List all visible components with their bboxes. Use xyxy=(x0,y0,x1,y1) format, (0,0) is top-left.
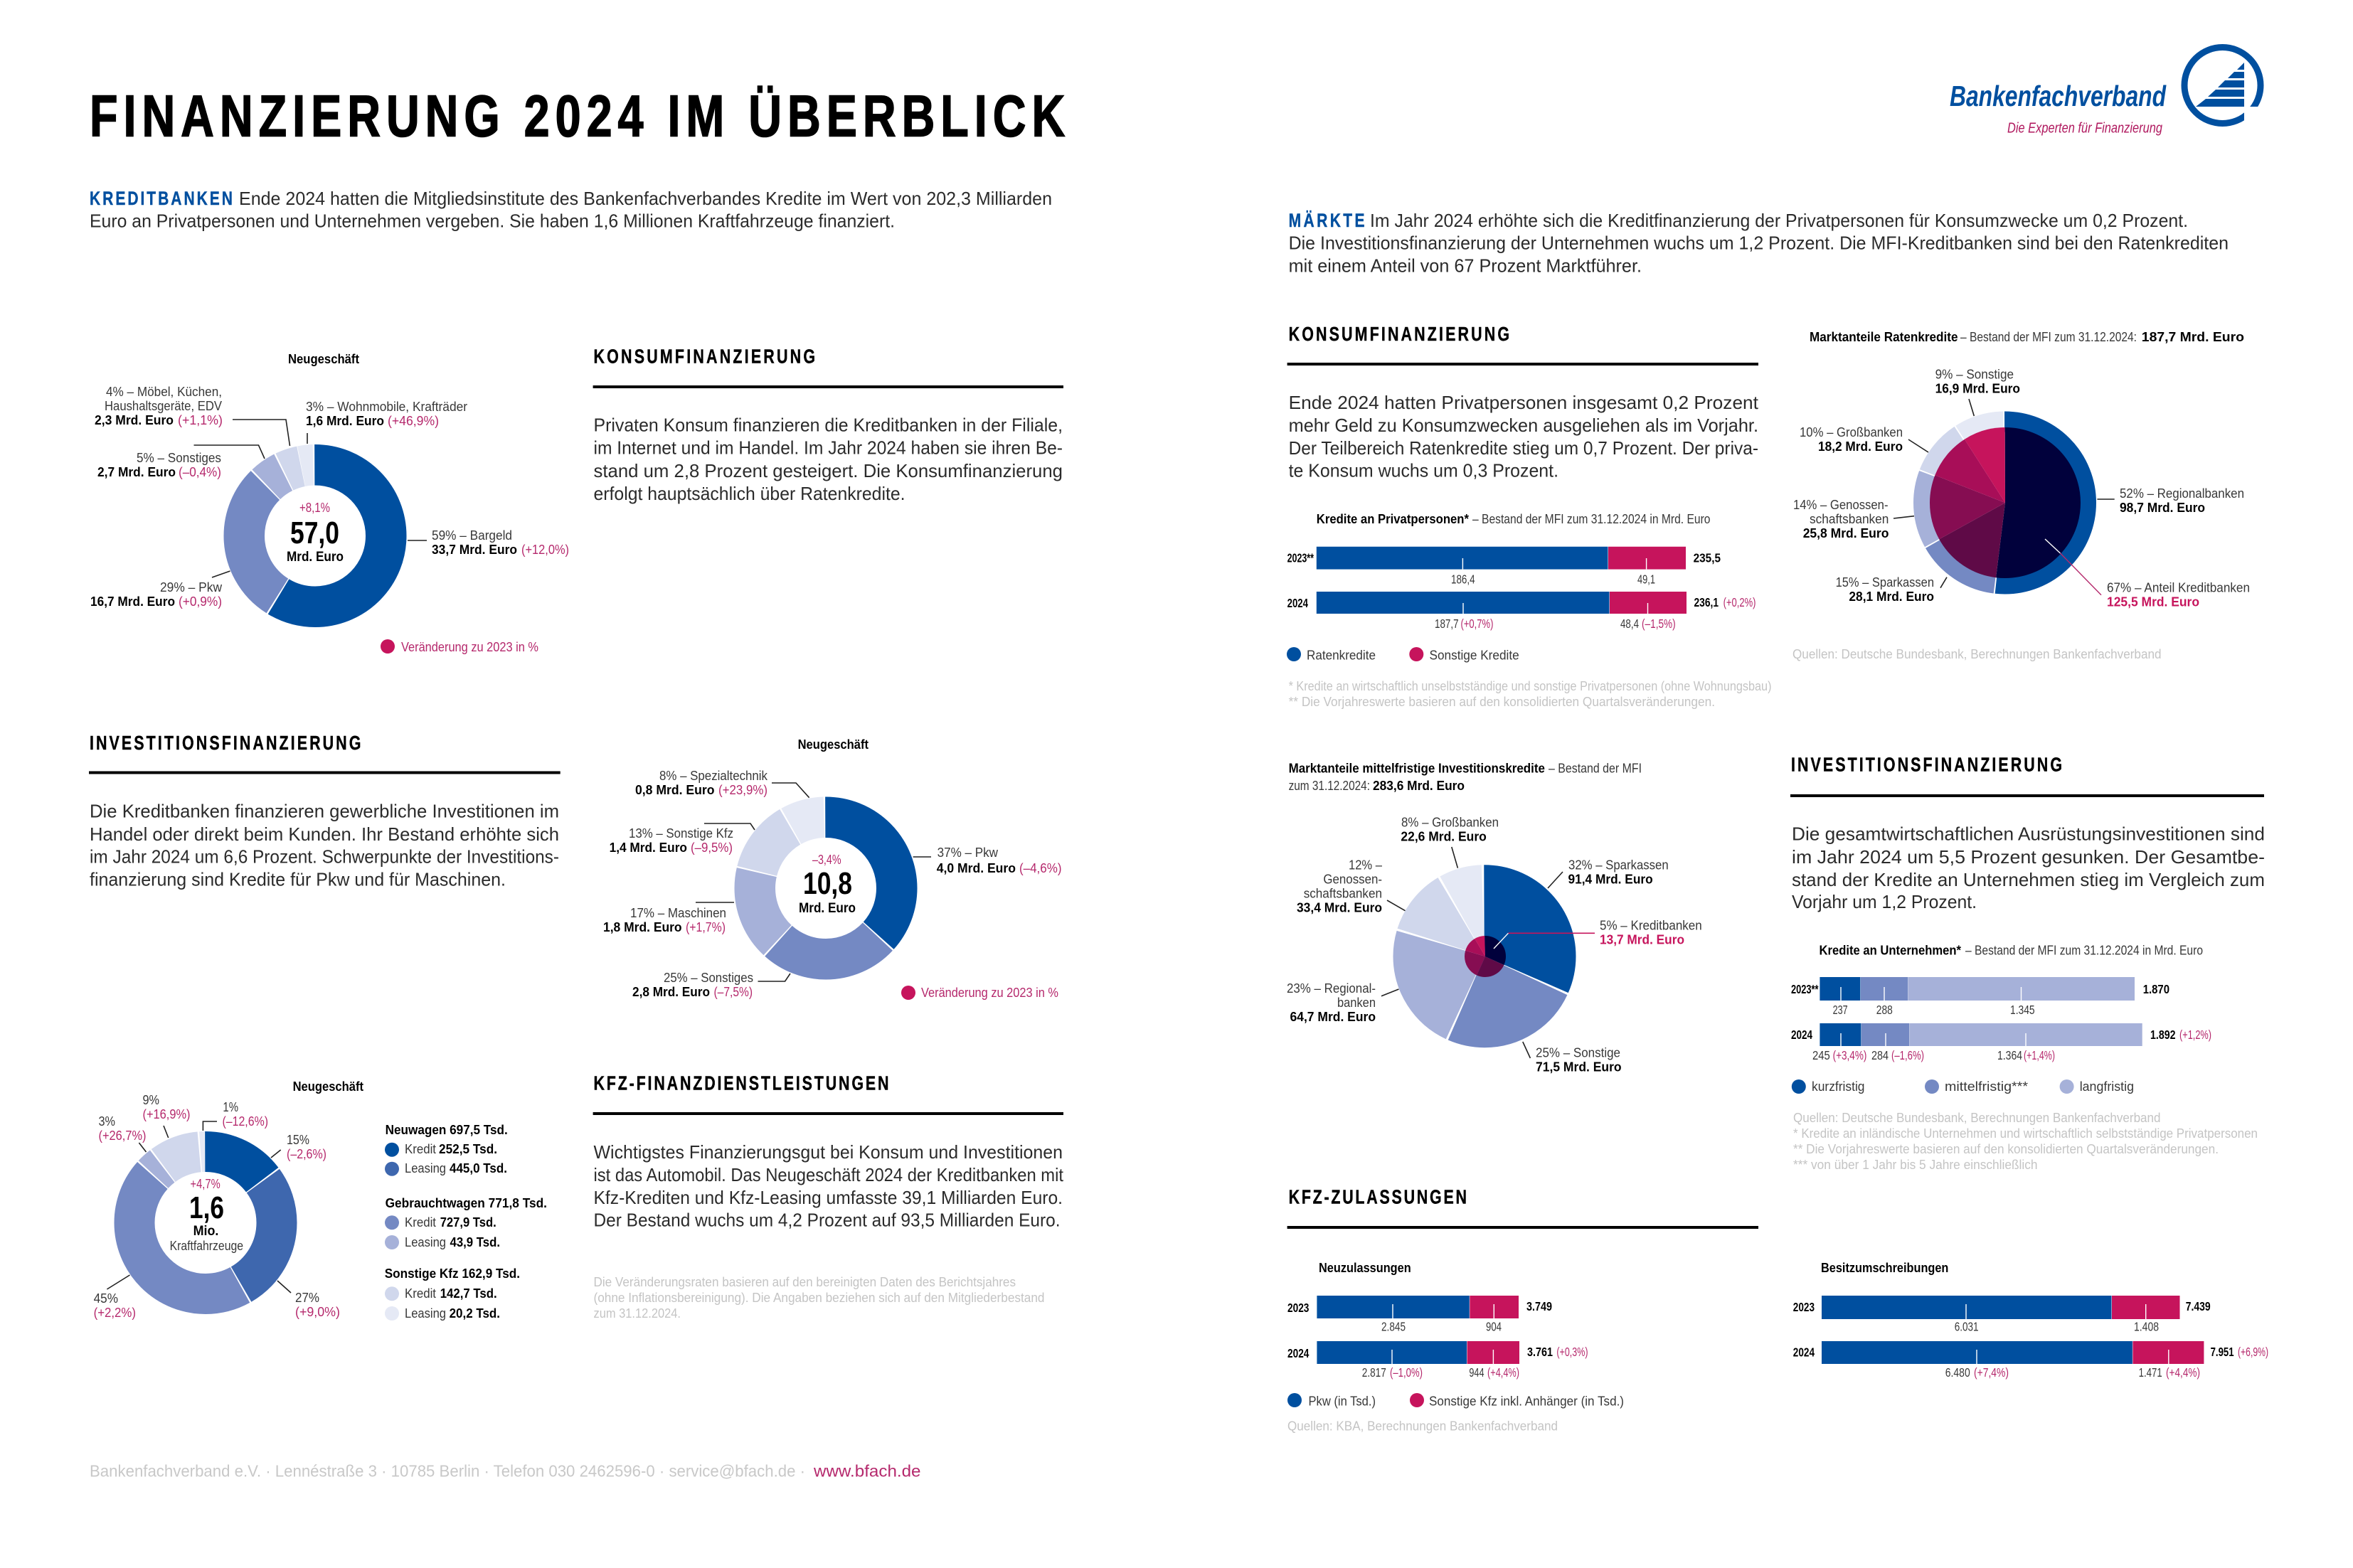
donut labels: 4,0 Mrd. Euro xyxy=(937,861,1016,875)
bar chart: Kredite an Privatpersonen: (+0,2%) xyxy=(1723,595,1756,609)
pie labels: 18,2 Mrd. Euro xyxy=(1818,439,1903,454)
legend: Neuwagen, Gebrauchtwagen, Sonstige Kfz: Sonstige Kfz 162,9 Tsd. xyxy=(385,1266,520,1281)
donut labels: 2,3 Mrd. Euro xyxy=(95,413,174,427)
panel: Kfz-Finanzdienstleistungen text: KFZ-FINANZDIENSTLEISTUNGEN xyxy=(593,1073,888,1094)
donut centre value: –3,4% xyxy=(812,853,841,867)
bar chart: Kredite an Unternehmen: 245 xyxy=(1812,1048,1830,1062)
bar chart: Kredite an Unternehmen: 237 xyxy=(1833,1003,1848,1017)
footnotes: Kredite an Privatpersonen: * Kredite an wirtschaftlich unselbstständige und sonstige Privatpersonen (ohne Wohnungsbau) xyxy=(1289,679,1771,693)
intro: Kreditbanken: Ende 2024 hatten die Mitgliedsinstitute des Bankenfachverbandes Kredite im Wert von 202,3 Milliarden xyxy=(239,188,1052,209)
legend: Ratenkredite, Sonstige Kredite: Sonstige Kredite xyxy=(1430,649,1519,663)
pie labels: 14% – Genossen- xyxy=(1793,498,1888,512)
legend: Neuwagen, Gebrauchtwagen, Sonstige Kfz: 142,7 Tsd. xyxy=(440,1286,497,1301)
pie labels: 64,7 Mrd. Euro xyxy=(1290,1010,1376,1024)
bar chart: Kredite an Privatpersonen: 187,7 xyxy=(1435,617,1459,631)
chart heading: 283,6 Mrd. Euro xyxy=(1373,778,1465,793)
title: FINANZIERUNG 2024 IM ÜBERBLICK xyxy=(90,83,1065,149)
legend: kurzfristig, mittelfristig, langfristig: mittelfristig*** xyxy=(1945,1079,2028,1094)
panel: Märkte Investitionsfinanzierung: Vorjahr um 1,2 Prozent. xyxy=(1792,891,1977,912)
legend: Neuwagen, Gebrauchtwagen, Sonstige Kfz: Gebrauchtwagen 771,8 Tsd. xyxy=(386,1196,547,1210)
donut labels: 3% – Wohnmobile, Krafträder xyxy=(306,400,467,414)
donut labels: (–12,6%) xyxy=(222,1114,268,1129)
legend: Neuwagen, Gebrauchtwagen, Sonstige Kfz: Kredit xyxy=(405,1286,436,1301)
panel: Konsumfinanzierung text: KONSUMFINANZIERUNG xyxy=(593,346,815,368)
footer: www.bfach.de xyxy=(813,1462,920,1481)
footnotes: Kredite an Unternehmen xyxy=(1793,1111,2258,1172)
donut centre value: 57,0 xyxy=(290,516,339,550)
panel: Kfz-Finanzdienstleistungen text xyxy=(593,1073,1064,1231)
panel: Investitionsfinanzierung text: Die Kreditbanken finanzieren gewerbliche Investitionen im xyxy=(90,801,559,822)
donut labels: (–7,5%) xyxy=(714,985,753,999)
donut centre value xyxy=(287,501,344,565)
donut labels: 29% – Pkw xyxy=(160,580,223,594)
legend: Neuwagen, Gebrauchtwagen, Sonstige Kfz: Kredit xyxy=(405,1142,436,1156)
bar chart: Kredite an Privatpersonen: 2024 xyxy=(1287,596,1308,610)
inner pie: Kreditbanken xyxy=(1475,946,1495,967)
donut labels: 0,8 Mrd. Euro xyxy=(635,783,714,797)
donut labels: 4% – Möbel, Küchen, xyxy=(106,385,222,399)
pie labels: 32% – Sparkassen xyxy=(1568,858,1669,873)
donut chart xyxy=(244,465,386,607)
donut labels: 13% – Sonstige Kfz xyxy=(629,826,733,841)
donut labels: (–0,4%) xyxy=(179,465,221,479)
donut labels: 45% xyxy=(94,1291,118,1306)
footnotes: Kredite an Privatpersonen xyxy=(1289,679,1771,709)
donut labels: 9% xyxy=(142,1093,159,1107)
inner pie: Anteil Kreditbanken xyxy=(1967,465,2043,540)
legend: kurzfristig, mittelfristig, langfristig: kurzfristig xyxy=(1812,1079,1865,1094)
panel: pie Marktanteile Investitionskredite xyxy=(1287,761,1702,1074)
intro: Märkte: MÄRKTE xyxy=(1289,210,1365,231)
bar chart: Neuzulassungen: 2.845 xyxy=(1381,1320,1406,1334)
chart heading: Neugeschäft xyxy=(288,352,359,366)
donut labels: (+1,7%) xyxy=(686,920,726,934)
pie labels: 125,5 Mrd. Euro xyxy=(2107,595,2199,609)
pie labels: 25,8 Mrd. Euro xyxy=(1803,526,1889,540)
donut labels: (+2,2%) xyxy=(94,1306,136,1320)
intro: Märkte: Im Jahr 2024 erhöhte sich die Kreditfinanzierung der Privatpersonen für Konsumzwecke um 0,2 Prozent. xyxy=(1370,210,2188,231)
donut labels: (+1,1%) xyxy=(178,413,223,427)
bar chart: Besitzumschreibungen: 7.951 xyxy=(2211,1345,2234,1359)
chart heading xyxy=(1810,329,2244,344)
donut labels: 8% – Spezialtechnik xyxy=(659,769,768,783)
donut labels: 17% – Maschinen xyxy=(630,906,726,920)
donut labels: 1,6 Mrd. Euro xyxy=(306,414,384,428)
donut centre value xyxy=(799,853,856,916)
chart heading: – Bestand der MFI xyxy=(1549,761,1642,776)
donut centre value: Mio. xyxy=(193,1224,218,1239)
panel: Märkte Konsumfinanzierung: Ende 2024 hatten Privatpersonen insgesamt 0,2 Prozent xyxy=(1289,392,1759,413)
bar chart: Neuzulassungen: 2023 xyxy=(1287,1301,1310,1315)
panel: Konsumfinanzierung text: erfolgt hauptsächlich über Ratenkredite. xyxy=(593,483,905,504)
donut centre value: +8,1% xyxy=(299,501,330,515)
pie labels: 15% – Sparkassen xyxy=(1836,575,1934,590)
source: Kfz-Zulassungen: Quellen: KBA, Berechnungen Bankenfachverband xyxy=(1287,1419,1558,1434)
bar chart: Kredite an Privatpersonen: 48,4 xyxy=(1620,617,1639,631)
chart heading: – Bestand der MFI zum 31.12.2024: xyxy=(1960,329,2137,344)
donut chart xyxy=(755,817,897,959)
donut labels: 37% – Pkw xyxy=(938,846,999,860)
legend: Neuwagen, Gebrauchtwagen, Sonstige Kfz: Leasing xyxy=(405,1235,446,1249)
bar chart: Kredite an Privatpersonen: (+0,7%) xyxy=(1461,617,1493,631)
panel: pie Marktanteile Ratenkredite xyxy=(1793,329,2250,609)
legend: Neuwagen, Gebrauchtwagen, Sonstige Kfz: Leasing xyxy=(405,1161,446,1175)
bar chart: Kredite an Privatpersonen: 49,1 xyxy=(1637,572,1655,587)
chart heading: Marktanteile mittelfristige Investitionskredite xyxy=(1289,761,1545,776)
note: Veränderungsraten: Die Veränderungsraten basieren auf den bereinigten Daten des Berichtsjahres xyxy=(593,1275,1016,1289)
intro: Kreditbanken: KREDITBANKEN xyxy=(90,188,233,210)
panel: Kfz-Finanzdienstleistungen text: Kfz-Krediten und Kfz-Leasing umfasste 39,1 Milliarden Euro. xyxy=(593,1187,1063,1208)
logo: Bankenfachverband: Die Experten für Finanzierung xyxy=(2007,121,2162,137)
legend: Neuwagen, Gebrauchtwagen, Sonstige Kfz: 727,9 Tsd. xyxy=(440,1215,496,1230)
bar chart: Neuzulassungen: (–1,0%) xyxy=(1390,1365,1423,1380)
pie labels: 9% – Sonstige xyxy=(1935,368,2014,382)
intro: Märkte: Die Investitionsfinanzierung der Unternehmen wuchs um 1,2 Prozent. Die MFI-Kreditbanken sind bei den Ratenkrediten xyxy=(1289,233,2229,254)
panel: Märkte Investitionsfinanzierung xyxy=(1790,754,2265,912)
panel: Investitionsfinanzierung text xyxy=(89,733,561,890)
donut labels: (+23,9%) xyxy=(718,783,767,797)
bar chart: Besitzumschreibungen: 2023 xyxy=(1793,1300,1815,1314)
legend: Pkw, Sonstige Kfz xyxy=(1287,1393,1624,1409)
footnotes: Kredite an Unternehmen: * Kredite an inländische Unternehmen und wirtschaftlich selbstständige Privatpersonen xyxy=(1793,1126,2258,1141)
intro: Märkte: mit einem Anteil von 67 Prozent Marktführer. xyxy=(1289,255,1642,276)
bar chart: Neuzulassungen: Neuzulassungen xyxy=(1319,1260,1411,1275)
footnotes: Kredite an Unternehmen: ** Die Vorjahreswerte basieren auf den konsolidierten Quartalsveränderungen. xyxy=(1793,1142,2219,1156)
panel: Investitionsfinanzierung text: im Jahr 2024 um 6,6 Prozent. Schwerpunkte der Investitions- xyxy=(90,846,559,867)
panel: donut Investition Neugeschäft xyxy=(603,737,1061,1000)
panel: Märkte Konsumfinanzierung: te Konsum wuchs um 0,3 Prozent. xyxy=(1289,460,1558,481)
legend: Neuwagen, Gebrauchtwagen, Sonstige Kfz: 43,9 Tsd. xyxy=(450,1235,500,1249)
pie labels: schaftsbanken xyxy=(1810,512,1889,526)
bar chart: Besitzumschreibungen: (+6,9%) xyxy=(2238,1345,2268,1359)
pie labels: 12% – xyxy=(1349,858,1382,873)
legend: Neuwagen, Gebrauchtwagen, Sonstige Kfz: 20,2 Tsd. xyxy=(450,1306,500,1321)
bar chart: Kredite an Unternehmen: 2024 xyxy=(1791,1028,1812,1042)
bar chart: Kredite an Privatpersonen: Kredite an Privatpersonen* xyxy=(1317,511,1470,526)
panel: Konsumfinanzierung text: Privaten Konsum finanzieren die Kreditbanken in der Filiale, xyxy=(593,414,1063,435)
bar chart: Neuzulassungen: (+0,3%) xyxy=(1556,1345,1588,1359)
legend: Neuwagen, Gebrauchtwagen, Sonstige Kfz: 252,5 Tsd. xyxy=(439,1142,497,1156)
outer pie xyxy=(1439,910,1530,1002)
heading: Kfz-Zulassungen: KFZ-ZULASSUNGEN xyxy=(1289,1187,1467,1208)
panel: Märkte Konsumfinanzierung xyxy=(1287,324,1759,481)
panel: Konsumfinanzierung text: stand um 2,8 Prozent gesteigert. Die Konsumfinanzierung xyxy=(593,460,1063,481)
pie labels xyxy=(1793,368,2250,609)
panel: Märkte Konsumfinanzierung: Der Teilbereich Ratenkredite stieg um 0,7 Prozent. Der priva- xyxy=(1289,437,1758,459)
donut centre value xyxy=(170,1177,243,1253)
bar chart: Kredite an Unternehmen: Kredite an Unternehmen* xyxy=(1820,943,1962,957)
pie labels: schaftsbanken xyxy=(1304,887,1382,901)
bar chart: Besitzumschreibungen: 1.471 xyxy=(2139,1365,2162,1380)
chart heading: 187,7 Mrd. Euro xyxy=(2142,329,2244,344)
pie labels: 71,5 Mrd. Euro xyxy=(1536,1060,1622,1074)
donut labels: (–2,6%) xyxy=(287,1147,326,1161)
pie labels: 13,7 Mrd. Euro xyxy=(1600,933,1684,947)
legend: Veränderung: Veränderung zu 2023 in % xyxy=(921,986,1058,1000)
intro: Kreditbanken: Euro an Privatpersonen und Unternehmen vergeben. Sie haben 1,6 Millionen Kraftfahrzeuge finanziert. xyxy=(90,210,895,232)
bar chart: Neuzulassungen: 3.749 xyxy=(1526,1299,1552,1313)
legend: kurzfristig, mittelfristig, langfristig xyxy=(1792,1079,2134,1094)
pie labels xyxy=(1287,816,1702,1074)
note: Veränderungsraten xyxy=(593,1275,1044,1321)
donut labels: 27% xyxy=(295,1291,319,1305)
donut labels: Haushaltsgeräte, EDV xyxy=(105,399,222,413)
bar chart: Kredite an Unternehmen: 1.892 xyxy=(2150,1028,2176,1042)
bar chart: Besitzumschreibungen: 6.480 xyxy=(1945,1365,1970,1380)
donut labels: (–4,6%) xyxy=(1019,861,1061,875)
donut centre value: Mrd. Euro xyxy=(287,550,344,565)
intro: Märkte xyxy=(1289,210,2229,276)
panel: Märkte Konsumfinanzierung: KONSUMFINANZIERUNG xyxy=(1289,324,1509,345)
footnotes: Kredite an Unternehmen: Quellen: Deutsche Bundesbank, Berechnungen Bankenfachverband xyxy=(1793,1111,2161,1125)
donut labels xyxy=(94,1093,340,1320)
panel: Investitionsfinanzierung text: Handel oder direkt beim Kunden. Ihr Bestand erhöhte sich xyxy=(90,823,559,845)
bar chart: Kredite an Unternehmen: 288 xyxy=(1876,1003,1893,1017)
pie labels: 10% – Großbanken xyxy=(1800,425,1903,439)
panel: Investitionsfinanzierung text: INVESTITIONSFINANZIERUNG xyxy=(90,733,361,754)
bar chart: Kredite an Unternehmen: 284 xyxy=(1871,1048,1889,1062)
pie labels: Genossen- xyxy=(1323,873,1382,887)
bar chart: Kredite an Unternehmen: 1.345 xyxy=(2010,1003,2035,1017)
footnotes: Kredite an Unternehmen: *** von über 1 Jahr bis 5 Jahre einschließlich xyxy=(1793,1158,2037,1172)
pie labels: banken xyxy=(1337,996,1376,1010)
bar chart: Kredite an Unternehmen: – Bestand der MFI zum 31.12.2024 in Mrd. Euro xyxy=(1965,943,2203,957)
donut labels: (+26,7%) xyxy=(98,1129,147,1143)
pie labels: 98,7 Mrd. Euro xyxy=(2120,501,2205,515)
bar chart: Neuzulassungen: 3.761 xyxy=(1527,1345,1553,1359)
bar chart: Kredite an Unternehmen xyxy=(1791,943,2211,1062)
pie labels: 5% – Kreditbanken xyxy=(1600,919,1702,933)
bar chart: Kredite an Privatpersonen: 236,1 xyxy=(1694,595,1719,609)
chart heading: Neugeschäft xyxy=(798,737,869,752)
note: Veränderungsraten: zum 31.12.2024. xyxy=(593,1306,681,1321)
bar chart: Kredite an Privatpersonen: 186,4 xyxy=(1451,572,1475,587)
pie labels: 16,9 Mrd. Euro xyxy=(1935,382,2020,396)
donut centre value: Mrd. Euro xyxy=(799,901,856,916)
donut labels: 15% xyxy=(287,1133,309,1147)
donut labels: 33,7 Mrd. Euro xyxy=(432,543,517,557)
donut labels: 2,7 Mrd. Euro xyxy=(97,465,176,479)
bar chart: Neuzulassungen: 2.817 xyxy=(1362,1365,1386,1380)
bar chart: Kredite an Unternehmen: 1.870 xyxy=(2143,982,2169,996)
donut labels: 59% – Bargeld xyxy=(432,528,512,543)
panel: Kfz-Finanzdienstleistungen text: ist das Automobil. Das Neugeschäft 2024 der Kreditbanken mit xyxy=(593,1164,1064,1185)
pie labels: 28,1 Mrd. Euro xyxy=(1849,590,1934,604)
source: Ratenkredite: Quellen: Deutsche Bundesbank, Berechnungen Bankenfachverband xyxy=(1792,647,2161,661)
bar chart: Kredite an Unternehmen: 1.364 xyxy=(1997,1048,2022,1062)
footer: Bankenfachverband e.V. · Lennéstraße 3 · 10785 Berlin · Telefon 030 2462596-0 · service@bfach.de · xyxy=(90,1462,805,1481)
intro: Kreditbanken xyxy=(90,188,1052,232)
bar chart: Kredite an Unternehmen: (+3,4%) xyxy=(1833,1048,1866,1062)
bar chart: Besitzumschreibungen xyxy=(1793,1260,2268,1380)
donut centre value: Kraftfahrzeuge xyxy=(170,1239,243,1253)
panel: Konsumfinanzierung text xyxy=(593,346,1063,504)
bar chart: Kredite an Privatpersonen: 235,5 xyxy=(1694,551,1721,565)
pie labels: 8% – Großbanken xyxy=(1401,816,1499,830)
chart heading xyxy=(1289,761,1642,793)
pie labels: 91,4 Mrd. Euro xyxy=(1568,873,1653,887)
outer ring xyxy=(1923,422,2086,584)
donut labels: (+16,9%) xyxy=(142,1107,191,1121)
panel: Kfz-Finanzdienstleistungen text: Wichtigstes Finanzierungsgut bei Konsum und Investitionen xyxy=(593,1141,1063,1163)
donut labels xyxy=(603,769,1061,999)
chart heading: zum 31.12.2024: xyxy=(1289,778,1370,793)
pie labels: 67% – Anteil Kreditbanken xyxy=(2107,581,2250,595)
donut labels: 2,8 Mrd. Euro xyxy=(632,985,710,999)
bar chart: Kredite an Unternehmen: (+1,2%) xyxy=(2179,1028,2211,1042)
bar chart: Besitzumschreibungen: Besitzumschreibungen xyxy=(1821,1260,1948,1275)
bar chart: Neuzulassungen xyxy=(1287,1260,1588,1380)
footnotes: Kredite an Privatpersonen: ** Die Vorjahreswerte basieren auf den konsolidierten Quartalsveränderungen. xyxy=(1289,695,1715,709)
bar chart: Kredite an Unternehmen: (–1,6%) xyxy=(1891,1048,1924,1062)
legend: Ratenkredite, Sonstige Kredite xyxy=(1287,647,1519,663)
donut labels: (–9,5%) xyxy=(691,841,733,855)
panel: Kfz-Finanzdienstleistungen text: Der Bestand wuchs um 4,2 Prozent auf 93,5 Milliarden Euro. xyxy=(593,1210,1060,1231)
legend: Neuwagen, Gebrauchtwagen, Sonstige Kfz xyxy=(385,1123,547,1321)
panel: Märkte Konsumfinanzierung: mehr Geld zu Konsumzwecken ausgeliehen als im Vorjahr. xyxy=(1289,415,1758,436)
legend: Pkw, Sonstige Kfz: Sonstige Kfz inkl. Anhänger (in Tsd.) xyxy=(1429,1394,1624,1409)
donut centre value: 10,8 xyxy=(803,866,852,901)
chart heading: Neugeschäft xyxy=(293,1079,363,1094)
logo: Bankenfachverband: Bankenfachverband xyxy=(1950,80,2167,112)
legend: Neuwagen, Gebrauchtwagen, Sonstige Kfz: Leasing xyxy=(405,1306,446,1321)
legend: Neuwagen, Gebrauchtwagen, Sonstige Kfz: Neuwagen 697,5 Tsd. xyxy=(386,1123,508,1137)
donut labels: 3% xyxy=(98,1114,115,1129)
panel: Märkte Investitionsfinanzierung: stand der Kredite an Unternehmen stieg im Vergleich zum xyxy=(1792,869,2265,890)
legend: Pkw, Sonstige Kfz: Pkw (in Tsd.) xyxy=(1309,1394,1376,1409)
bar chart: Kredite an Unternehmen: 2023** xyxy=(1791,982,1819,996)
donut labels: (+46,9%) xyxy=(388,414,439,428)
legend: Neuwagen, Gebrauchtwagen, Sonstige Kfz: Kredit xyxy=(405,1215,436,1230)
panel: Märkte Investitionsfinanzierung: INVESTITIONSFINANZIERUNG xyxy=(1791,754,2062,776)
donut labels: 16,7 Mrd. Euro xyxy=(90,594,175,609)
donut labels: (+12,0%) xyxy=(521,543,569,557)
pie labels: 33,4 Mrd. Euro xyxy=(1297,901,1382,915)
donut labels: (+0,9%) xyxy=(179,594,222,609)
chart heading: Marktanteile Ratenkredite xyxy=(1810,329,1958,344)
donut labels: (+9,0%) xyxy=(295,1305,340,1319)
donut labels: 25% – Sonstiges xyxy=(664,971,753,985)
legend: kurzfristig, mittelfristig, langfristig: langfristig xyxy=(2080,1079,2134,1094)
panel: Investitionsfinanzierung text: finanzierung sind Kredite für Pkw und für Maschinen. xyxy=(90,869,506,890)
bar chart: Besitzumschreibungen: 1.408 xyxy=(2134,1320,2159,1334)
bar chart: Kredite an Privatpersonen: (–1,5%) xyxy=(1642,617,1676,631)
donut labels xyxy=(90,385,569,609)
donut centre value: 1,6 xyxy=(189,1190,224,1225)
bar chart: Besitzumschreibungen: 7.439 xyxy=(2186,1299,2211,1313)
panel: Märkte Investitionsfinanzierung: Die gesamtwirtschaftlichen Ausrüstungsinvestitionen sind xyxy=(1792,823,2265,845)
bar chart: Neuzulassungen: 944 xyxy=(1469,1365,1484,1380)
panel: donut Kfz Neugeschäft xyxy=(94,1079,547,1321)
donut labels: 1,4 Mrd. Euro xyxy=(610,841,687,855)
pie labels: 25% – Sonstige xyxy=(1536,1046,1620,1060)
bar chart: Neuzulassungen: 2024 xyxy=(1287,1346,1310,1360)
pie labels: 23% – Regional- xyxy=(1287,981,1376,996)
logo: Bankenfachverband xyxy=(1950,47,2261,137)
note: Veränderungsraten: (ohne Inflationsbereinigung). Die Angaben beziehen sich auf den Mitgliederbestand xyxy=(593,1291,1044,1305)
donut labels: 1% xyxy=(223,1100,238,1114)
pie labels: 22,6 Mrd. Euro xyxy=(1401,830,1487,844)
donut labels: 1,8 Mrd. Euro xyxy=(603,920,682,934)
heading: Kfz-Zulassungen xyxy=(1287,1187,1758,1229)
legend: Ratenkredite, Sonstige Kredite: Ratenkredite xyxy=(1307,649,1376,663)
bar chart: Neuzulassungen: 904 xyxy=(1486,1320,1502,1334)
bar chart: Besitzumschreibungen: (+4,4%) xyxy=(2166,1365,2200,1380)
bar chart: Neuzulassungen: (+4,4%) xyxy=(1487,1365,1519,1380)
bar chart: Kredite an Privatpersonen xyxy=(1287,511,1756,631)
legend: Neuwagen, Gebrauchtwagen, Sonstige Kfz: 445,0 Tsd. xyxy=(450,1161,507,1175)
bar chart: Kredite an Unternehmen: (+1,4%) xyxy=(2024,1048,2055,1062)
donut centre value: +4,7% xyxy=(191,1177,221,1191)
bar chart: Besitzumschreibungen: (+7,4%) xyxy=(1974,1365,2009,1380)
legend: Veränderung: Veränderung zu 2023 in % xyxy=(401,640,538,654)
bar chart: Besitzumschreibungen: 6.031 xyxy=(1955,1320,1979,1334)
panel: Märkte Investitionsfinanzierung: im Jahr 2024 um 5,5 Prozent gesunken. Der Gesamtbe- xyxy=(1792,846,2265,868)
panel: Konsumfinanzierung text: im Internet und im Handel. Im Jahr 2024 haben sie ihren Be- xyxy=(593,437,1063,459)
bar chart: Kredite an Privatpersonen: 2023** xyxy=(1287,551,1314,565)
bar chart: Kredite an Privatpersonen: – Bestand der MFI zum 31.12.2024 in Mrd. Euro xyxy=(1472,511,1710,526)
donut chart xyxy=(134,1152,277,1294)
bar chart: Besitzumschreibungen: 2024 xyxy=(1793,1345,1815,1360)
donut labels: 5% – Sonstiges xyxy=(137,451,221,465)
panel: donut Konsum Neugeschäft xyxy=(90,352,569,654)
pie labels: 52% – Regionalbanken xyxy=(2120,486,2244,501)
